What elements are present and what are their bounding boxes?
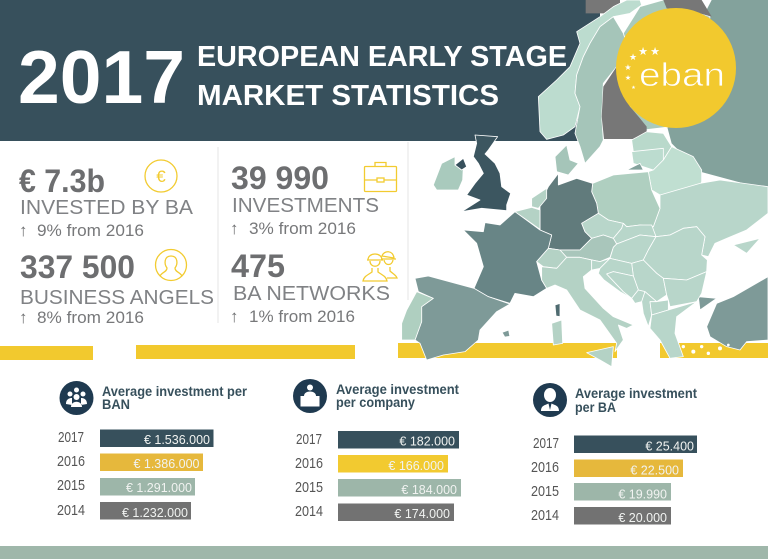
icon: workers xyxy=(363,252,397,281)
chart: average investment per BAN xyxy=(57,381,248,520)
bars: € 174.000 xyxy=(394,507,450,521)
central and southern europe xyxy=(402,172,768,367)
stat: invested by BA: € 7.3b xyxy=(19,163,105,199)
bars: € 166.000 xyxy=(388,459,444,473)
europe map xyxy=(402,0,768,367)
heading xyxy=(336,382,459,410)
heading: Average investment per xyxy=(102,384,248,399)
bars: 2014 xyxy=(57,502,85,519)
stat: investments: 39 990 xyxy=(231,160,329,196)
heading: per company xyxy=(336,395,415,410)
bars: 2016 xyxy=(57,453,85,470)
bars: 2015 xyxy=(531,483,559,500)
logo: eban: eban xyxy=(639,56,725,93)
icon: businessman xyxy=(533,383,567,417)
logo: eban: ★ xyxy=(624,63,632,72)
bars: 2015 xyxy=(295,479,323,496)
stat: investments: ↑ xyxy=(230,219,238,238)
bars: 2015 xyxy=(57,477,85,494)
stat: business angels: 8% from 2016 xyxy=(37,308,144,327)
stat: invested by BA xyxy=(19,163,194,240)
bars: 2017 xyxy=(296,431,322,448)
heading: per BA xyxy=(575,400,616,415)
northern europe xyxy=(433,0,768,212)
bars: € 25.400 xyxy=(645,440,694,454)
stat dividers xyxy=(218,142,408,323)
logo: eban xyxy=(616,8,736,128)
bars: € 184.000 xyxy=(401,483,457,497)
bars: € 1.232.000 xyxy=(122,506,188,520)
stat: investments: INVESTMENTS xyxy=(232,195,379,217)
headline xyxy=(197,41,567,112)
bars: € 1.386.000 xyxy=(133,457,200,471)
stat: business angels: ↑ xyxy=(19,308,28,327)
main year: 2017 xyxy=(18,35,185,119)
logo: eban: ★ xyxy=(631,85,636,91)
bars: € 182.000 xyxy=(399,434,455,448)
bars: 2017 xyxy=(533,435,559,452)
yellow stripes xyxy=(0,343,768,360)
stat: BA networks: BA NETWORKS xyxy=(233,283,390,305)
stat: invested by BA: INVESTED BY BA xyxy=(20,197,194,219)
bars: € 19.990 xyxy=(618,488,667,502)
logo: eban: ★ xyxy=(625,74,631,82)
bars xyxy=(57,429,214,520)
stat: BA networks: 475 xyxy=(231,248,285,284)
headline: EUROPEAN EARLY STAGE xyxy=(197,41,567,73)
stat: invested by BA: 9% from 2016 xyxy=(37,221,144,240)
heading xyxy=(575,386,697,415)
bars: 2016 xyxy=(295,455,323,472)
stat: BA networks: 1% from 2016 xyxy=(249,307,355,326)
icon: person xyxy=(156,250,186,280)
logo: eban: ★ xyxy=(629,52,637,62)
bars: € 22.500 xyxy=(630,464,679,478)
stat: business angels: BUSINESS ANGELS xyxy=(20,287,214,309)
icon: briefcase xyxy=(364,162,396,192)
header band xyxy=(0,0,600,141)
bars: 2016 xyxy=(531,459,559,476)
stat: BA networks: ↑ xyxy=(230,307,238,326)
footer band xyxy=(0,546,768,559)
icon: person at desk xyxy=(293,379,327,413)
stat: investments xyxy=(230,160,379,238)
bars: € 20.000 xyxy=(618,511,667,525)
heading: BAN xyxy=(102,397,130,412)
logo: eban: ★ xyxy=(650,46,660,58)
chart: average investment per company xyxy=(293,379,461,521)
icon: euro coin: € xyxy=(156,167,166,186)
bars: 2017 xyxy=(58,429,84,446)
bars xyxy=(531,435,697,525)
bars: 2014 xyxy=(531,507,559,524)
bars: € 1.291.000 xyxy=(126,481,192,495)
chart: average investment per BA xyxy=(531,383,697,525)
icon: group of people xyxy=(60,381,94,415)
heading xyxy=(102,384,248,412)
bars: € 1.536.000 xyxy=(144,433,210,447)
great britain xyxy=(462,135,511,212)
bars xyxy=(295,431,461,521)
stat: investments: 3% from 2016 xyxy=(249,219,356,238)
icon: euro coin xyxy=(145,160,177,192)
heading: Average investment xyxy=(575,386,697,401)
heading: Average investment xyxy=(336,382,459,397)
logo: eban: ★ xyxy=(638,46,648,58)
stat: invested by BA: ↑ xyxy=(19,221,28,240)
stat: BA networks xyxy=(230,248,390,326)
bars: 2014 xyxy=(295,503,323,520)
headline: MARKET STATISTICS xyxy=(197,80,499,112)
stat: business angels xyxy=(19,249,214,327)
stat: business angels: 337 500 xyxy=(20,249,135,285)
